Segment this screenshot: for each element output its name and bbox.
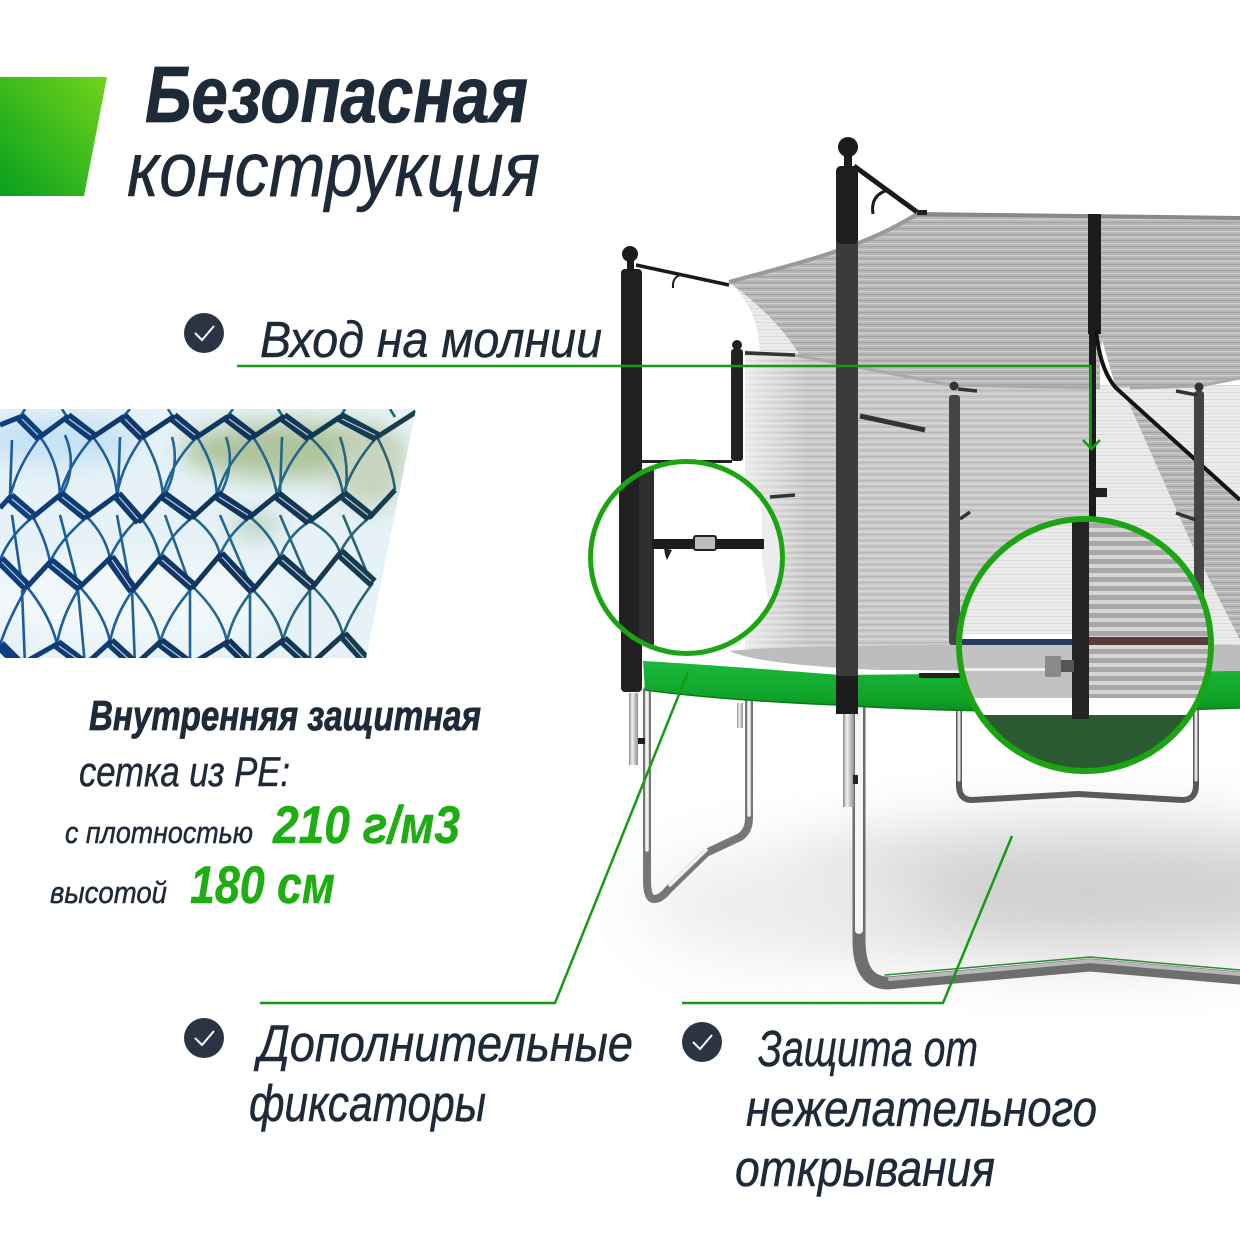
zoom circle: entrance lock [957,516,1217,775]
white gap at zipper [1100,342,1112,385]
net close-up photo [0,409,416,665]
net specification text: сетка из PE: [79,748,290,795]
net specification text: высотой [50,875,167,910]
zipper strap [1088,214,1240,524]
front left post [621,246,732,692]
title: конструкция [127,127,540,213]
net specification text [50,692,481,915]
callout line: extra fixers [260,672,688,1003]
callout line: opening protection [682,836,1012,1003]
title: Безопасная [145,50,528,139]
net front, upper section [729,214,1240,388]
back enclosure posts [731,340,1204,645]
legs [629,690,1240,983]
net specification text: с плотностью [65,815,253,850]
label: opening protection: нежелательного [746,1080,1097,1137]
label: opening protection: Защита от [758,1020,978,1077]
label: extra fixers: Дополнительные [254,1015,633,1072]
net knots [0,412,416,665]
net right panel [1127,399,1240,640]
label: zipper entrance: Вход на молнии [260,311,602,368]
knot highlights [2,419,375,663]
net specification text: Внутренняя защитная [89,692,481,739]
label: opening protection [735,1020,1097,1197]
front centre post [836,137,927,714]
trampoline illustration [621,137,1240,983]
icon: check protection [682,1022,722,1062]
label: extra fixers [249,1015,633,1132]
callout line: zipper [237,366,1100,449]
green accent block [0,77,107,196]
trampoline mat [729,645,1240,672]
zipper opening area [1096,385,1240,650]
label: extra fixers: фиксаторы [249,1075,486,1132]
net threads [0,409,395,665]
label: opening protection: открывания [735,1140,995,1197]
net specification text: 180 см [190,856,335,915]
net specification text: 210 г/м3 [272,796,460,855]
icon: check zipper [184,313,224,353]
icon: check fixers [184,1018,224,1058]
net back, lower section [745,352,1100,650]
title [127,50,540,213]
floor shadow [640,828,1240,955]
green frame pad [643,661,1240,711]
zoom circle: strap fixing [590,460,785,660]
